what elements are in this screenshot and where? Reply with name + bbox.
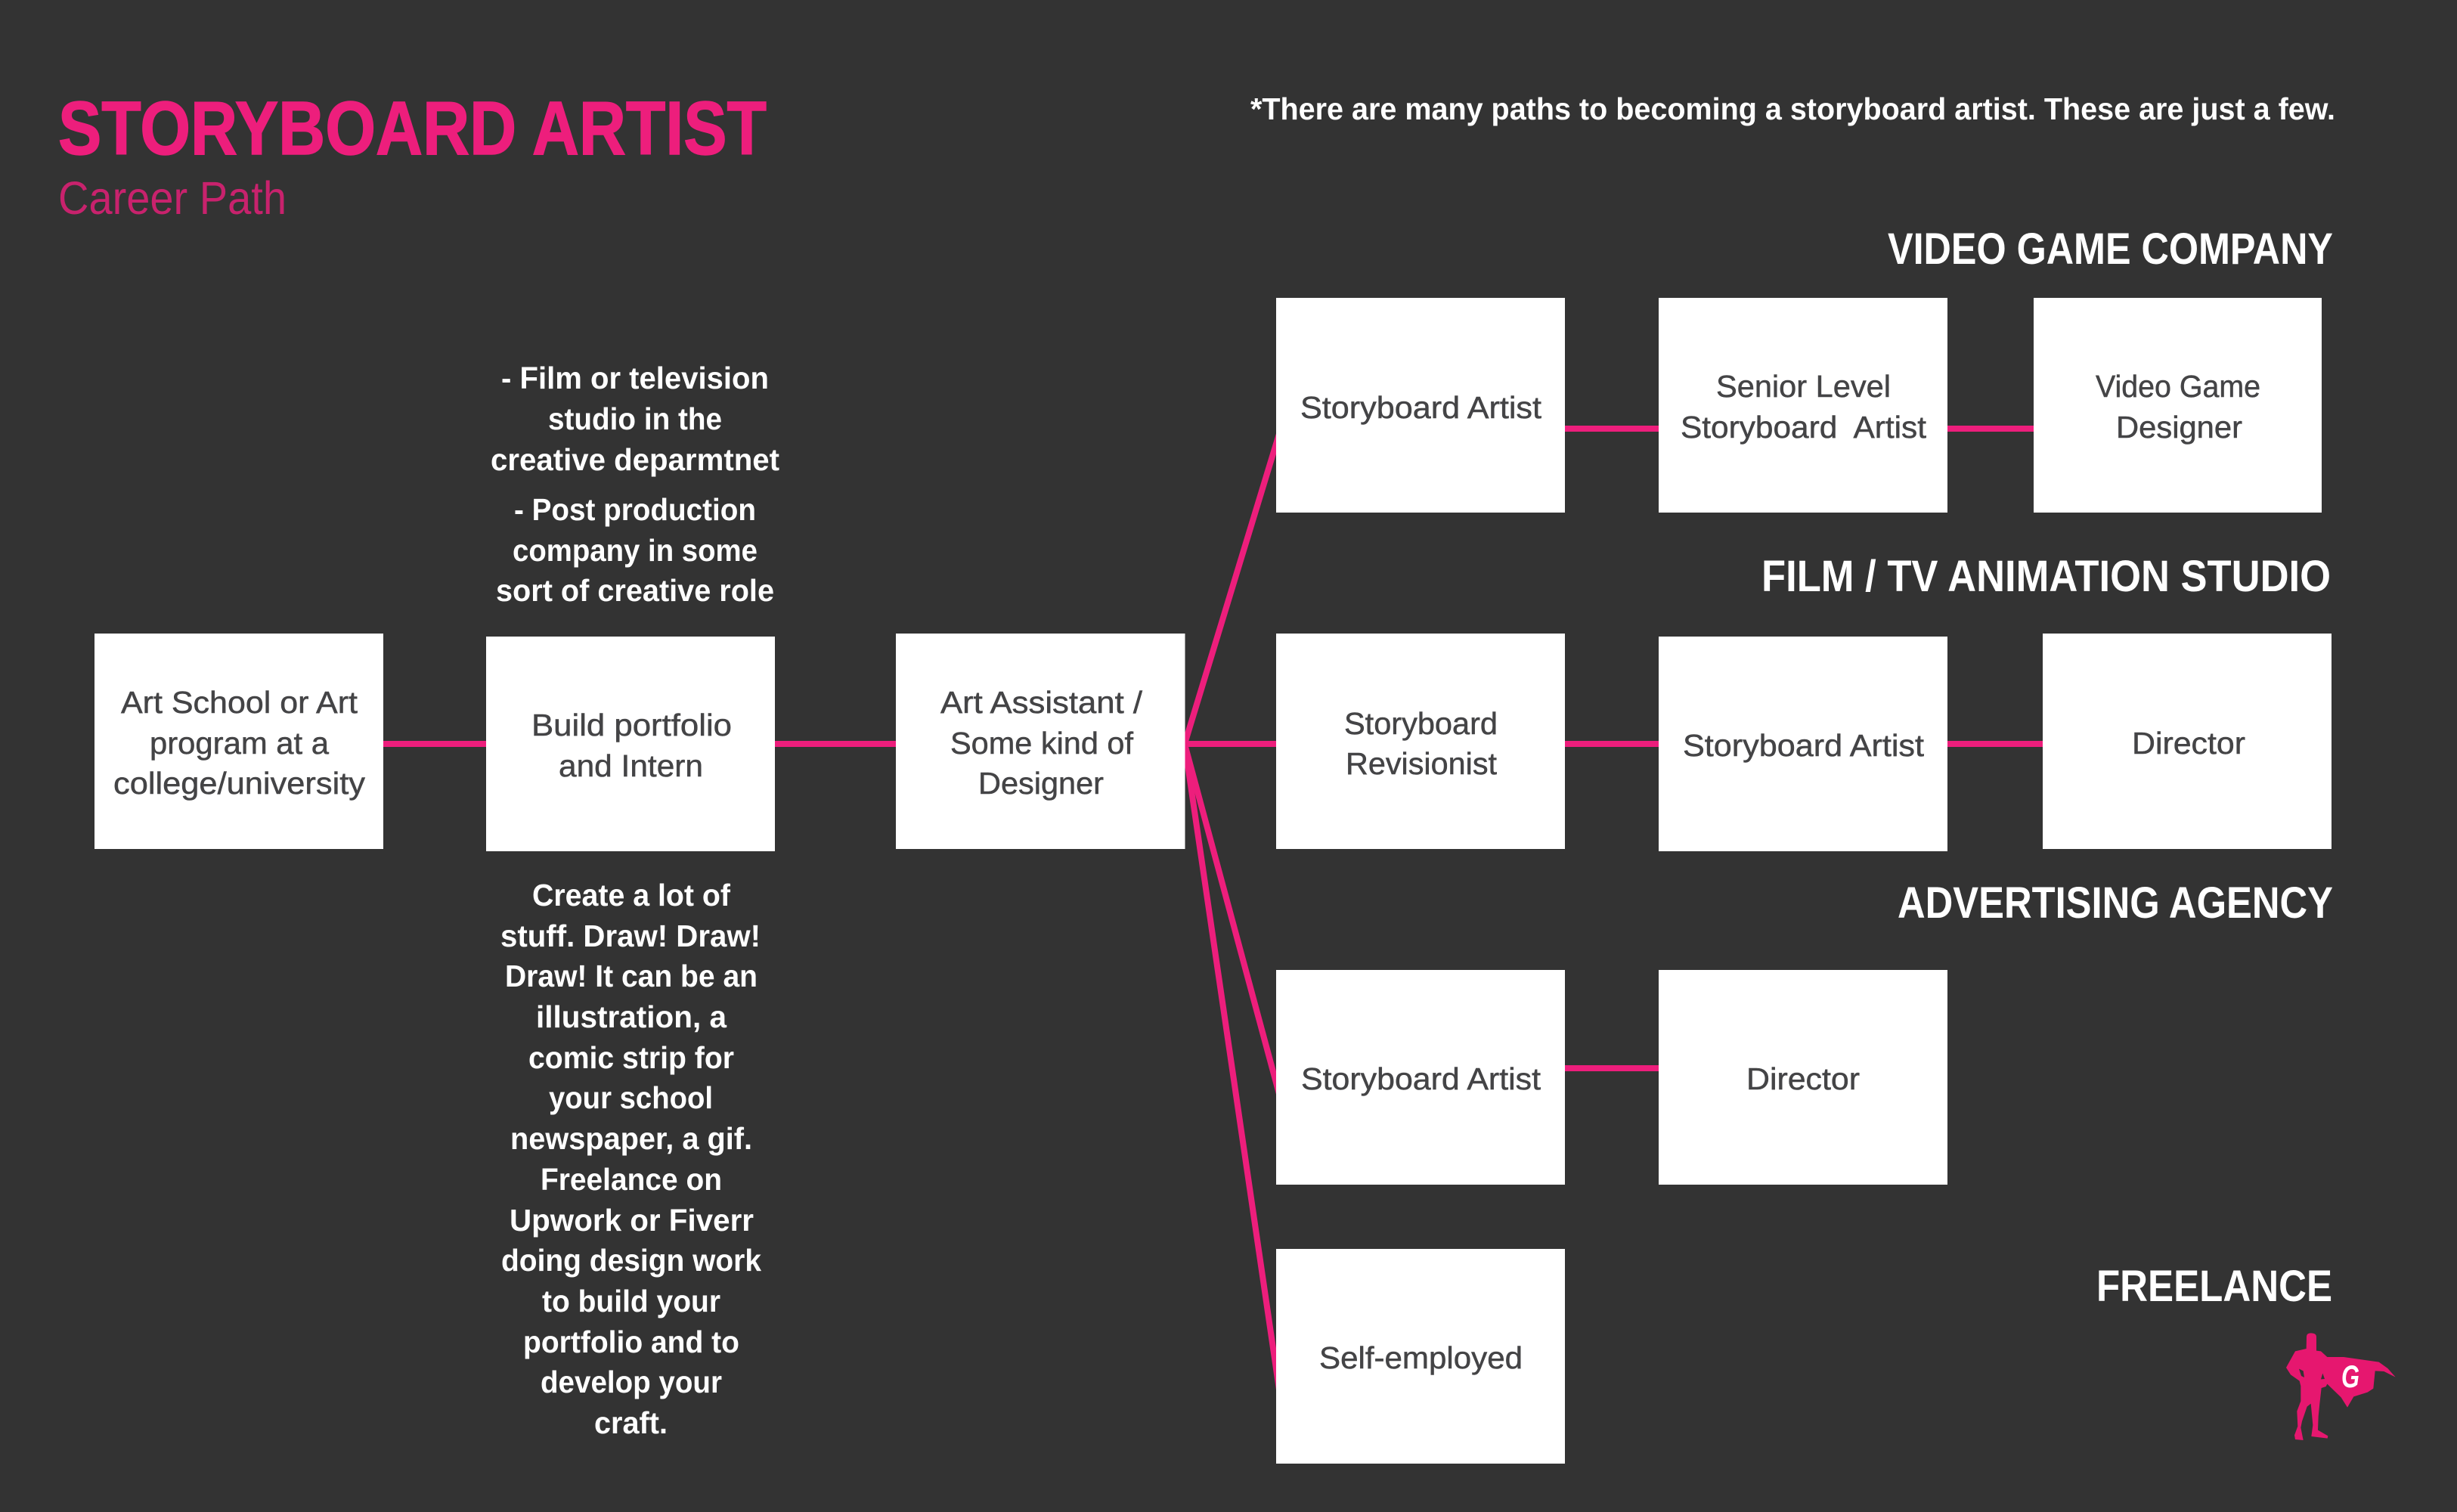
text block: internship options: - Post production <box>514 492 756 527</box>
box: self-employed: Self-employed <box>1319 1340 1523 1375</box>
text block: portfolio advice <box>500 878 761 1440</box>
heading: video game company: VIDEO GAME COMPANY <box>1888 225 2333 274</box>
connector: art assistant to self-employed <box>1185 744 1279 1390</box>
text block: portfolio advice: craft. <box>594 1405 668 1440</box>
connector: art assistant to video game storyboard artist <box>1185 434 1279 744</box>
box: video game designer <box>2034 298 2322 513</box>
connector: art assistant to advertising storyboard artist <box>1185 744 1279 1094</box>
text block: internship options: company in some <box>513 533 758 568</box>
box: art school: Art School or Art <box>121 685 358 720</box>
box: art assistant: Some kind of <box>950 726 1134 761</box>
connector: advertising row <box>1565 1065 1659 1071</box>
box: storyboard artist advertising: Storyboard Artist <box>1301 1061 1541 1096</box>
heading: film and tv animation studio: FILM / TV ANIMATION STUDIO <box>1761 552 2331 601</box>
box: director film <box>2043 634 2332 849</box>
text block: internship options <box>491 361 779 608</box>
icon letter: G: G <box>2341 1359 2359 1394</box>
box: art school: program at a <box>150 726 329 761</box>
text block: portfolio advice: your school <box>549 1080 713 1115</box>
box: director film: Director <box>2132 726 2245 761</box>
subtitle: Career Path <box>58 172 287 224</box>
box: art assistant: Designer <box>978 766 1104 801</box>
box: senior level storyboard artist <box>1659 298 1947 513</box>
box: art school <box>94 634 383 849</box>
box: director advertising <box>1659 970 1947 1185</box>
box: build portfolio: Build portfolio <box>531 708 732 742</box>
box: storyboard artist film: Storyboard Artist <box>1683 728 1925 763</box>
box: art assistant: Art Assistant / <box>940 685 1143 720</box>
text block: portfolio advice: stuff. Draw! Draw! <box>500 919 761 953</box>
box: build portfolio <box>486 637 775 851</box>
box: storyboard artist advertising <box>1276 970 1565 1185</box>
box: storyboard revisionist <box>1276 634 1565 849</box>
heading: freelance: FREELANCE <box>2096 1262 2332 1311</box>
text block: internship options: sort of creative role <box>496 573 774 608</box>
box: art school: college/university <box>113 766 366 801</box>
box: storyboard artist video game: Storyboard Artist <box>1300 390 1542 425</box>
text block: portfolio advice: Draw! It can be an <box>505 959 758 993</box>
box: storyboard revisionist: Revisionist <box>1346 746 1498 781</box>
box: storyboard artist video game <box>1276 298 1565 513</box>
box: senior level storyboard artist: Senior Level <box>1716 369 1891 404</box>
text block: portfolio advice: newspaper, a gif. <box>510 1121 752 1156</box>
text block: portfolio advice: portfolio and to <box>523 1325 739 1359</box>
text block: portfolio advice: Upwork or Fiverr <box>510 1203 754 1238</box>
connector: video game row first <box>1565 426 1659 432</box>
text block: portfolio advice: develop your <box>541 1365 722 1399</box>
text block: portfolio advice: doing design work <box>501 1243 761 1278</box>
box: storyboard revisionist: Storyboard <box>1344 706 1498 741</box>
box: build portfolio: and Intern <box>559 748 703 783</box>
text block: portfolio advice: Freelance on <box>541 1162 722 1197</box>
connector: portfolio to art assistant <box>775 741 896 747</box>
note: *There are many paths to becoming a storyboard artist. These are just a few. <box>1250 91 2335 126</box>
text block: internship options: - Film or television <box>501 361 769 395</box>
text block: portfolio advice: illustration, a <box>536 999 727 1034</box>
text block: portfolio advice: to build your <box>542 1284 720 1318</box>
box: senior level storyboard artist: Storyboard Artist <box>1681 410 1927 445</box>
text block: internship options: creative deparmtnet <box>491 442 779 477</box>
icon: caped hero logo <box>2286 1333 2396 1440</box>
text block: portfolio advice: Create a lot of <box>532 878 730 912</box>
box: video game designer: Designer <box>2116 410 2242 445</box>
box: storyboard artist film <box>1659 637 1947 851</box>
connector: school to portfolio <box>383 741 486 747</box>
heading: advertising agency: ADVERTISING AGENCY <box>1898 878 2333 928</box>
box: video game designer: Video Game <box>2096 369 2260 404</box>
connector: film row second <box>1947 741 2043 747</box>
text block: portfolio advice: comic strip for <box>528 1040 734 1075</box>
connector: video game row second <box>1947 426 2034 432</box>
box: art assistant <box>896 634 1185 849</box>
connector: art assistant to revisionist <box>1185 741 1276 747</box>
text block: internship options: studio in the <box>548 401 722 436</box>
box: director advertising: Director <box>1746 1061 1860 1096</box>
title: STORYBOARD ARTIST <box>58 86 767 171</box>
connector: film row first <box>1565 741 1659 747</box>
box: self-employed <box>1276 1249 1565 1464</box>
